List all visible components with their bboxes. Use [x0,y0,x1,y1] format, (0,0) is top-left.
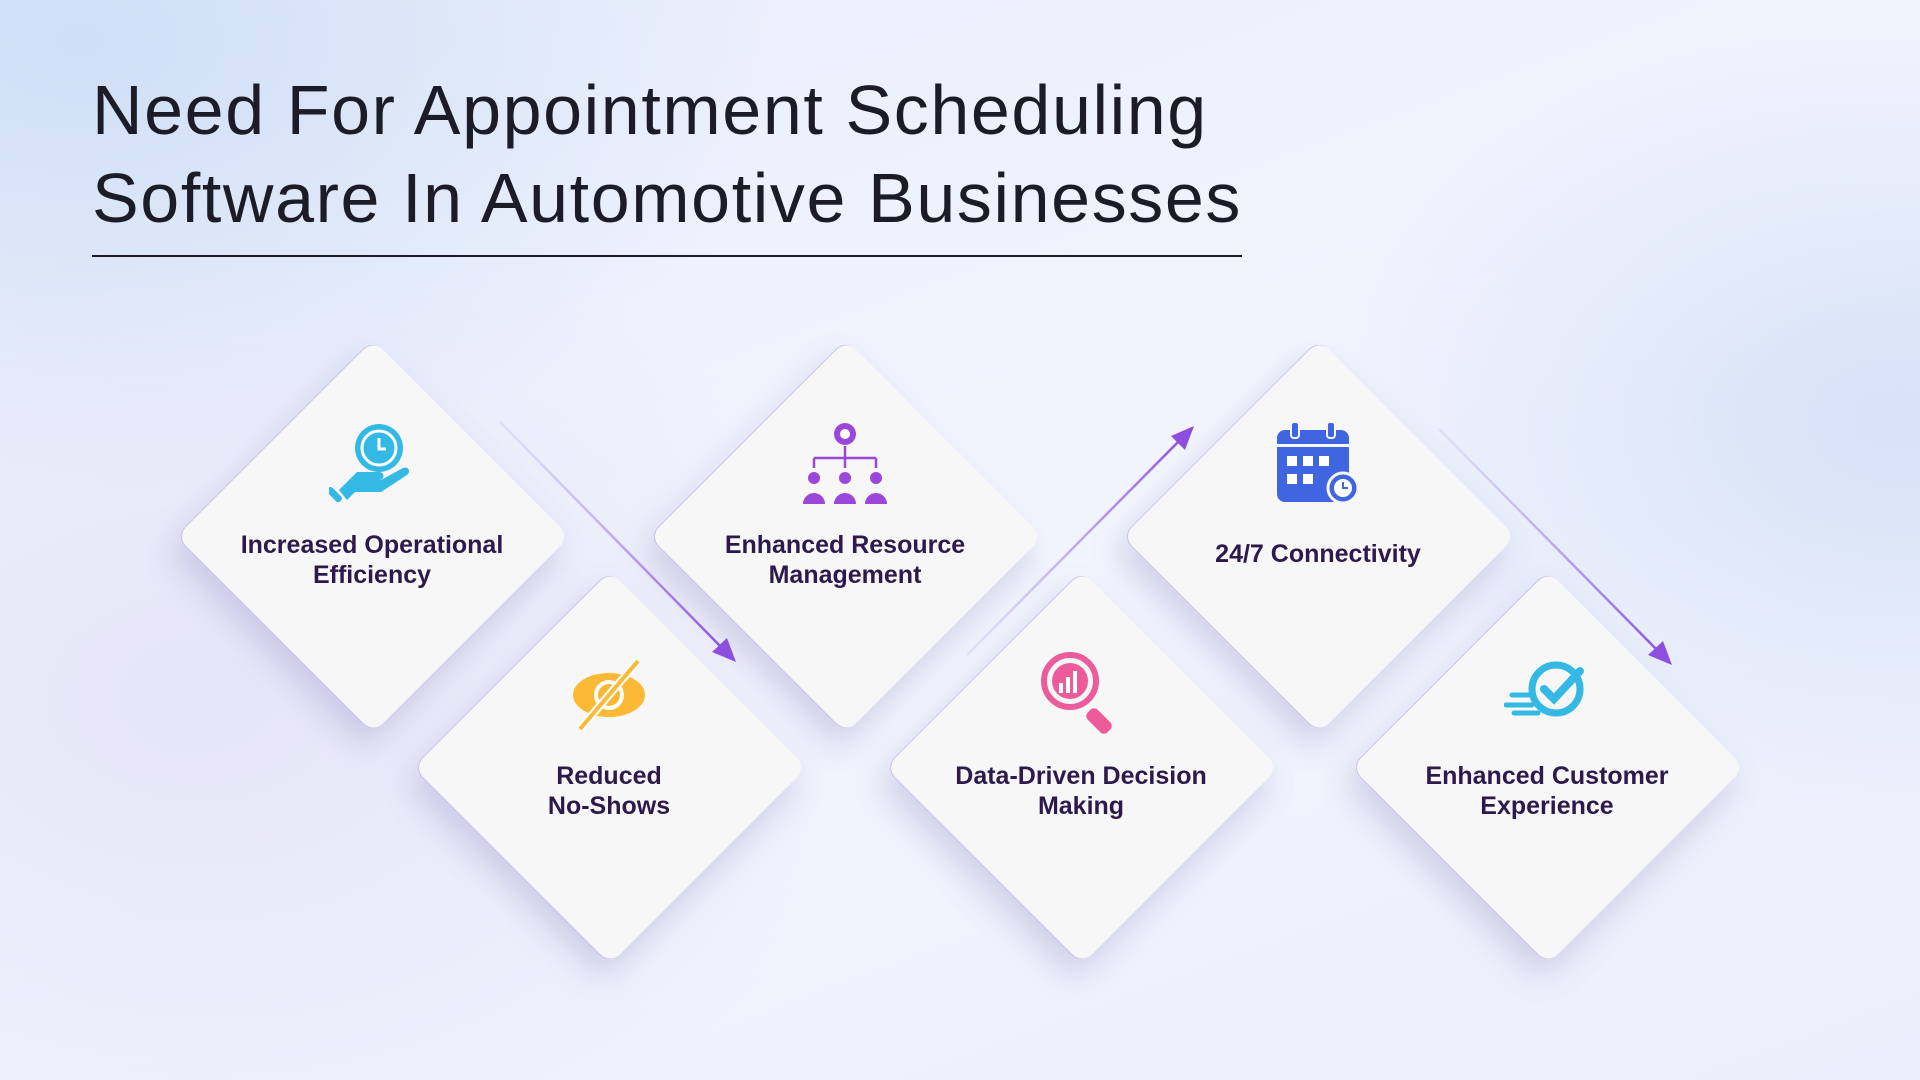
panel: data-driven decision making [878,576,1272,980]
label [1425,762,1669,820]
icon: crossed eye [573,660,645,730]
label: Enhanced Customer [1425,762,1669,790]
title: Need For Appointment Scheduling [92,71,1208,149]
label: Experience [1480,792,1614,820]
title: Software In Automotive Businesses [92,159,1242,237]
icon: calendar [1277,423,1356,502]
arrow 2 [967,426,1194,655]
label: Efficiency [313,561,431,589]
label: No-Shows [548,792,670,820]
label: Making [1038,792,1124,820]
title [92,71,1242,237]
panel: enhanced resource management [642,345,1036,749]
label [548,762,670,820]
label: Data-Driven Decision [955,762,1207,790]
arrow 1 [500,422,736,662]
label: Increased Operational [241,531,503,559]
label: Management [769,561,921,589]
icon: magnifier chart [1041,652,1112,734]
panel: enhanced customer experience [1344,576,1739,980]
label: Enhanced Resource [725,531,965,559]
label: Reduced [556,762,662,790]
icon: hand with clock [329,424,410,502]
label: 24/7 Connectivity [1215,540,1421,568]
arrow 3 [1439,429,1672,665]
panel: increased operational efficiency [170,345,564,748]
icon: fast check [1504,662,1584,716]
panel: reduced no-shows [407,576,800,980]
label [241,531,503,589]
panel: 24/7 connectivity [1114,345,1510,749]
icon: hierarchy [803,423,887,504]
label [955,762,1207,820]
label [725,531,965,589]
